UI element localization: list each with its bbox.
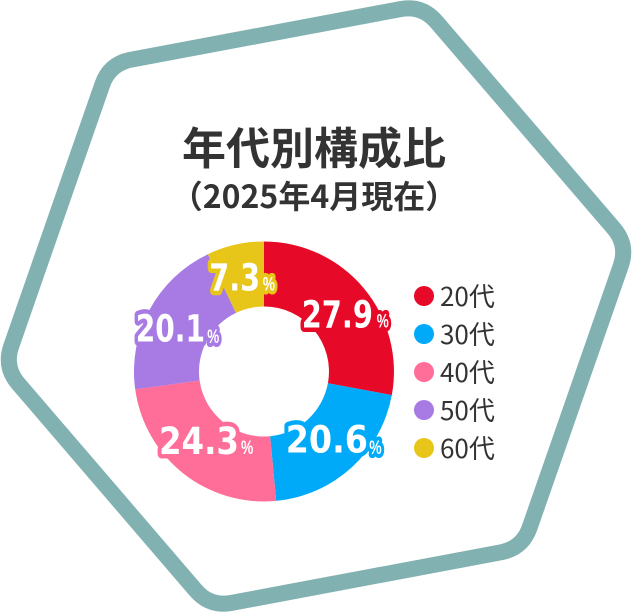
title: 年代別構成比 xyxy=(182,113,446,177)
value label: 20.1%: 20.1 xyxy=(136,308,205,351)
segment: 50s xyxy=(134,254,236,389)
value label: 24.3%: 24.3 xyxy=(159,420,239,463)
value label: 20.1%: % xyxy=(207,327,219,348)
value label: 27.9%: 27.9 xyxy=(302,294,373,337)
segment: 60s xyxy=(208,241,264,313)
legend item: 60s: 60代 xyxy=(440,429,495,466)
segment: 30s xyxy=(270,383,392,501)
legend item: 30s xyxy=(414,315,495,352)
legend item: 40s: 40代 xyxy=(440,353,495,390)
legend item: 20s xyxy=(414,277,495,314)
segment: 40s xyxy=(135,380,276,501)
value label: 20.6%: 20.6 xyxy=(286,419,368,462)
value label: 7.3%: 7.3 xyxy=(209,257,260,300)
value label: 24.3%: % xyxy=(241,438,253,459)
legend item: 30s: 30代 xyxy=(440,315,495,352)
legend item: 20s: 20代 xyxy=(440,277,495,314)
subtitle: as-of date: （2025年4月現在） xyxy=(171,172,457,218)
segment: 20s xyxy=(264,242,394,395)
value label: 27.9%: % xyxy=(377,312,389,333)
legend item: 40s xyxy=(414,353,495,390)
legend item: 50s xyxy=(414,391,495,428)
value label: 7.3%: % xyxy=(263,275,275,296)
value label: 20.6%: % xyxy=(369,438,382,459)
donut chart xyxy=(134,241,394,501)
legend xyxy=(414,277,495,466)
legend item: 60s xyxy=(414,429,495,466)
legend item: 50s: 50代 xyxy=(440,391,495,428)
